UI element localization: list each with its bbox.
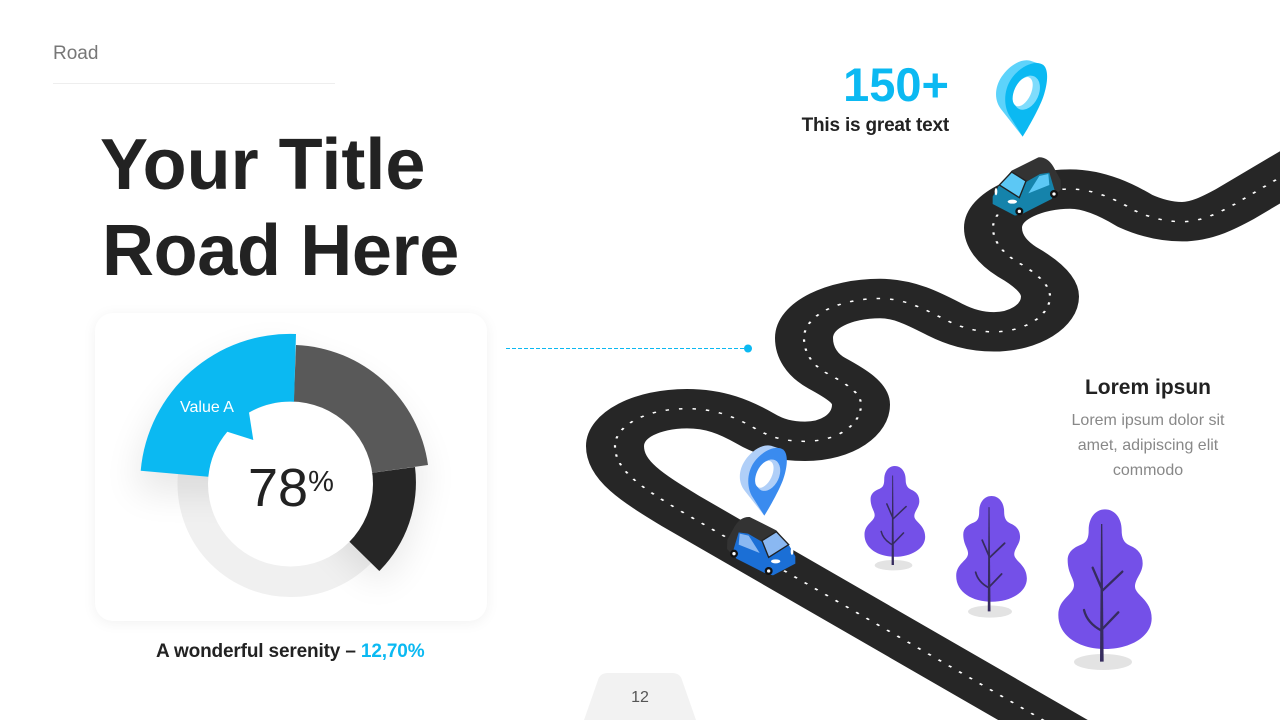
lane markings	[615, 154, 1280, 720]
soft shadow	[136, 350, 425, 585]
road body	[615, 154, 1280, 720]
car: teal	[993, 157, 1061, 216]
tree small	[864, 466, 925, 570]
track ring	[193, 386, 388, 582]
header rule	[53, 83, 335, 84]
page number: 12	[631, 689, 649, 706]
text block heading: Lorem ipsun	[1085, 376, 1211, 399]
title: Your Title	[100, 125, 425, 205]
tree large	[1058, 509, 1152, 670]
text block body: commodo	[1113, 462, 1183, 479]
tree medium	[956, 496, 1027, 618]
segment label: Value A	[180, 399, 234, 416]
car: blue	[727, 517, 795, 575]
text block body: Lorem ipsum dolor sit	[1072, 412, 1224, 429]
title: Road Here	[102, 211, 459, 291]
text block body: amet, adipiscing elit	[1078, 437, 1218, 454]
segment: black	[290, 467, 416, 571]
icon: blue location pin	[740, 445, 787, 516]
center hole	[208, 402, 373, 566]
big stat: 150+	[843, 58, 949, 111]
chart caption: A wonderful serenity – 12,70%	[156, 641, 424, 662]
panel: donut card	[95, 313, 487, 621]
segment: dark gray	[290, 345, 428, 484]
stat caption: This is great text	[802, 115, 949, 136]
text block body	[1072, 412, 1224, 479]
icon: cyan location pin	[996, 60, 1047, 137]
title	[100, 125, 459, 291]
center value: 78%	[248, 458, 334, 518]
segment: value A	[141, 334, 296, 477]
section label: Road	[53, 43, 98, 64]
